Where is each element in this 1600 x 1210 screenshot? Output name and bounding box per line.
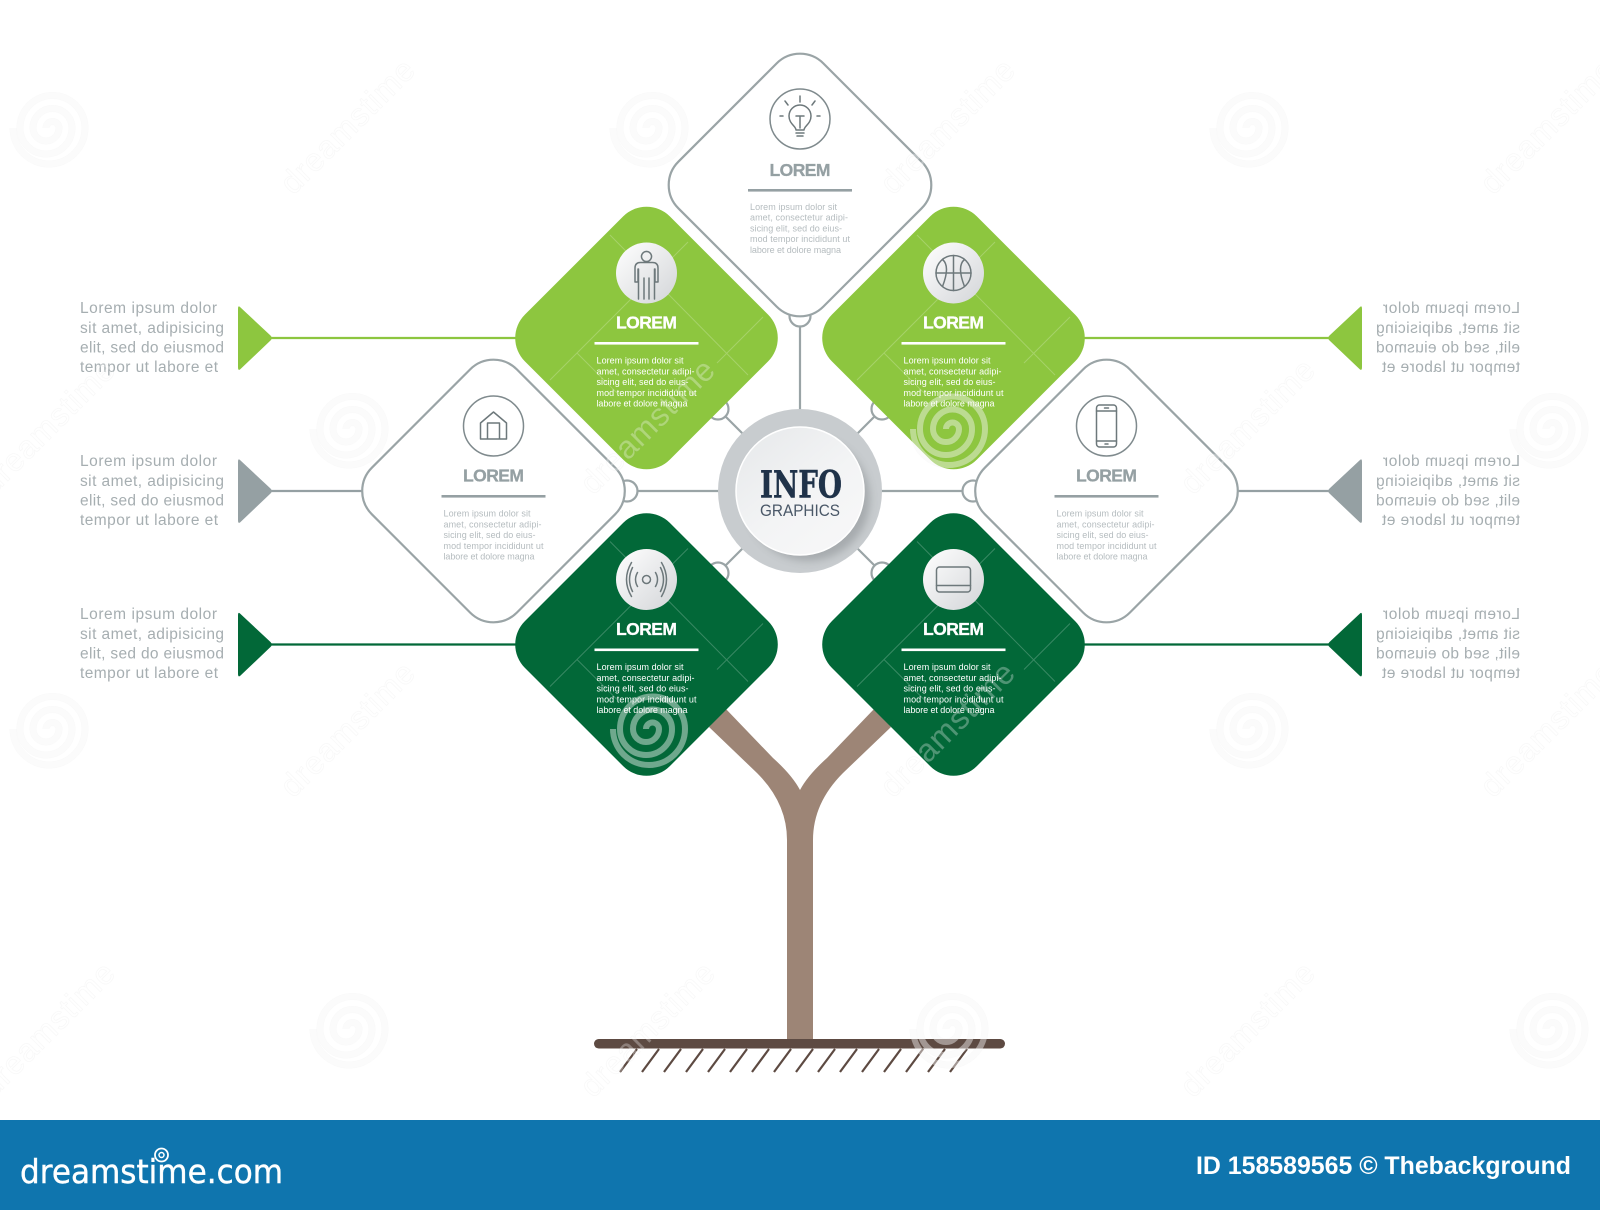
body text [1056, 509, 1157, 562]
body text: Lorem ipsum dolor sit [750, 202, 837, 212]
note row: dark green left: elit, sed do eiusmod [80, 646, 224, 663]
note row: gray right: sit amet, adipisicing [1376, 473, 1520, 490]
body text: labore et dolore magna [1056, 552, 1148, 562]
body text: sicing elit, sed do eius- [444, 530, 536, 540]
body text [904, 356, 1004, 408]
note row: light green right: Lorem ipsum dolor [1383, 300, 1520, 317]
body text: Lorem ipsum dolor sit [1056, 509, 1144, 519]
note row: dark green right [1080, 606, 1520, 682]
body text [596, 662, 697, 715]
note row: dark green left [80, 606, 520, 682]
body text [904, 662, 1004, 715]
body text: labore et dolore magna [444, 552, 534, 562]
body text: Lorem ipsum dolor sit [904, 356, 991, 366]
icon: basketball [923, 242, 984, 304]
panel: light green left diamond [502, 193, 791, 483]
watermark layer: dreamstime [1173, 352, 1322, 501]
body text: sicing elit, sed do eius- [596, 684, 688, 694]
note row: light green left: Lorem ipsum dolor [80, 300, 217, 317]
watermark layer: dreamstime [273, 52, 422, 201]
body text [750, 202, 850, 255]
body text: Lorem ipsum dolor sit [904, 662, 991, 672]
note row: light green right: tempor ut labore et [1381, 359, 1520, 376]
note row: light green left: elit, sed do eiusmod [80, 340, 224, 357]
body text: Lorem ipsum dolor sit [596, 356, 684, 366]
icon: signal [616, 549, 677, 610]
note row: light green right [1080, 300, 1520, 376]
note row: gray left: elit, sed do eiusmod [80, 493, 224, 510]
body text: amet, consectetur adipi- [750, 213, 848, 223]
body text: amet, consectetur adipi- [596, 673, 694, 683]
body text: sicing elit, sed do eius- [904, 684, 996, 694]
icon: phone [1076, 396, 1136, 456]
heading: LOREM [463, 466, 524, 486]
heading: LOREM [616, 312, 677, 332]
body text: amet, consectetur adipi- [904, 366, 1002, 376]
subtitle: GRAPHICS: GRAPHICS [760, 502, 840, 520]
body text: sicing elit, sed do eius- [750, 223, 842, 233]
body text: Lorem ipsum dolor sit [444, 509, 531, 519]
watermark layer: dreamstime [873, 52, 1022, 201]
note row: light green left: sit amet, adipisicing [80, 320, 224, 337]
body text: mod tempor incididunt ut [444, 541, 544, 551]
watermark layer: dreamstime [873, 655, 1022, 804]
body text: labore et dolore magna [750, 245, 841, 255]
watermark layer: dreamstime [273, 655, 422, 804]
panel: light green right diamond [809, 193, 1098, 483]
footer credit: ID 158589565 © Thebackground [1196, 1152, 1571, 1180]
body text: mod tempor incididunt ut [750, 234, 850, 244]
note row: gray right [1235, 453, 1520, 529]
footer logo: dreamstime.com [20, 1152, 283, 1191]
body text: sicing elit, sed do eius- [904, 377, 996, 387]
ground [594, 1039, 1005, 1072]
note row: gray right: Lorem ipsum dolor [1383, 453, 1520, 470]
note row: dark green left: sit amet, adipisicing [80, 626, 224, 643]
note row: light green right: sit amet, adipisicing [1376, 320, 1520, 337]
note row: dark green right: Lorem ipsum dolor [1383, 606, 1520, 623]
body text: mod tempor incididunt ut [1056, 541, 1157, 551]
body text: sicing elit, sed do eius- [596, 377, 688, 387]
body text: mod tempor incididunt ut [904, 388, 1004, 398]
body text: amet, consectetur adipi- [1056, 519, 1154, 529]
icon: tablet [923, 549, 984, 610]
heading: LOREM [616, 619, 677, 639]
panel: dark green right diamond [809, 500, 1098, 789]
panel: dark green left diamond [502, 500, 791, 789]
centre circle [718, 409, 882, 573]
body text: mod tempor incididunt ut [596, 388, 697, 398]
connectors from centre to diamonds [616, 306, 984, 584]
footer bar [0, 1120, 1600, 1210]
body text: amet, consectetur adipi- [904, 673, 1002, 683]
note row: light green right: elit, sed do eiusmod [1376, 340, 1520, 357]
body text: sicing elit, sed do eius- [1056, 530, 1148, 540]
body text [444, 509, 544, 562]
panel: top outlined diamond [655, 40, 945, 330]
note row: gray left: Lorem ipsum dolor [80, 453, 217, 470]
watermark layer: dreamstime [573, 352, 722, 501]
heading: LOREM [1076, 466, 1137, 486]
note row: dark green right: sit amet, adipisicing [1376, 626, 1520, 643]
note row: dark green right: tempor ut labore et [1381, 665, 1520, 682]
heading: LOREM [923, 619, 984, 639]
panel: gray right diamond [962, 346, 1251, 636]
note row: gray left [80, 453, 365, 529]
note row: dark green left: Lorem ipsum dolor [80, 606, 217, 623]
note row: dark green right: elit, sed do eiusmod [1376, 646, 1520, 663]
body text: amet, consectetur adipi- [596, 366, 694, 376]
note row: gray right: tempor ut labore et [1381, 512, 1520, 529]
icon: light bulb [770, 89, 830, 149]
body text: labore et dolore magna [904, 398, 994, 408]
body text: mod tempor incididunt ut [596, 694, 697, 704]
note row: gray left: tempor ut labore et [80, 512, 219, 529]
body text: Lorem ipsum dolor sit [596, 662, 684, 672]
title: INFO: INFO [760, 462, 842, 506]
note row: light green left: tempor ut labore et [80, 359, 219, 376]
note row: light green left [80, 300, 520, 376]
note row: gray right: elit, sed do eiusmod [1376, 493, 1520, 510]
body text [596, 356, 697, 408]
note row: dark green left: tempor ut labore et [80, 665, 219, 682]
body text: amet, consectetur adipi- [444, 519, 542, 529]
note row: gray left: sit amet, adipisicing [80, 473, 224, 490]
body text: labore et dolore magna [596, 398, 688, 408]
heading: LOREM [770, 160, 830, 180]
right side notes (mirrored) [1080, 300, 1520, 682]
tree trunk and branches [709, 708, 891, 1040]
body text: mod tempor incididunt ut [904, 694, 1004, 704]
heading: LOREM [923, 312, 984, 332]
watermark layer: dreamstime [1173, 955, 1322, 1104]
body text: labore et dolore magna [596, 705, 688, 715]
panel: gray left diamond [349, 346, 638, 636]
body text: labore et dolore magna [904, 705, 994, 715]
icon: person [616, 242, 677, 304]
left side notes [80, 300, 520, 682]
icon: house [464, 396, 524, 456]
watermark layer: dreamstime [573, 955, 722, 1104]
